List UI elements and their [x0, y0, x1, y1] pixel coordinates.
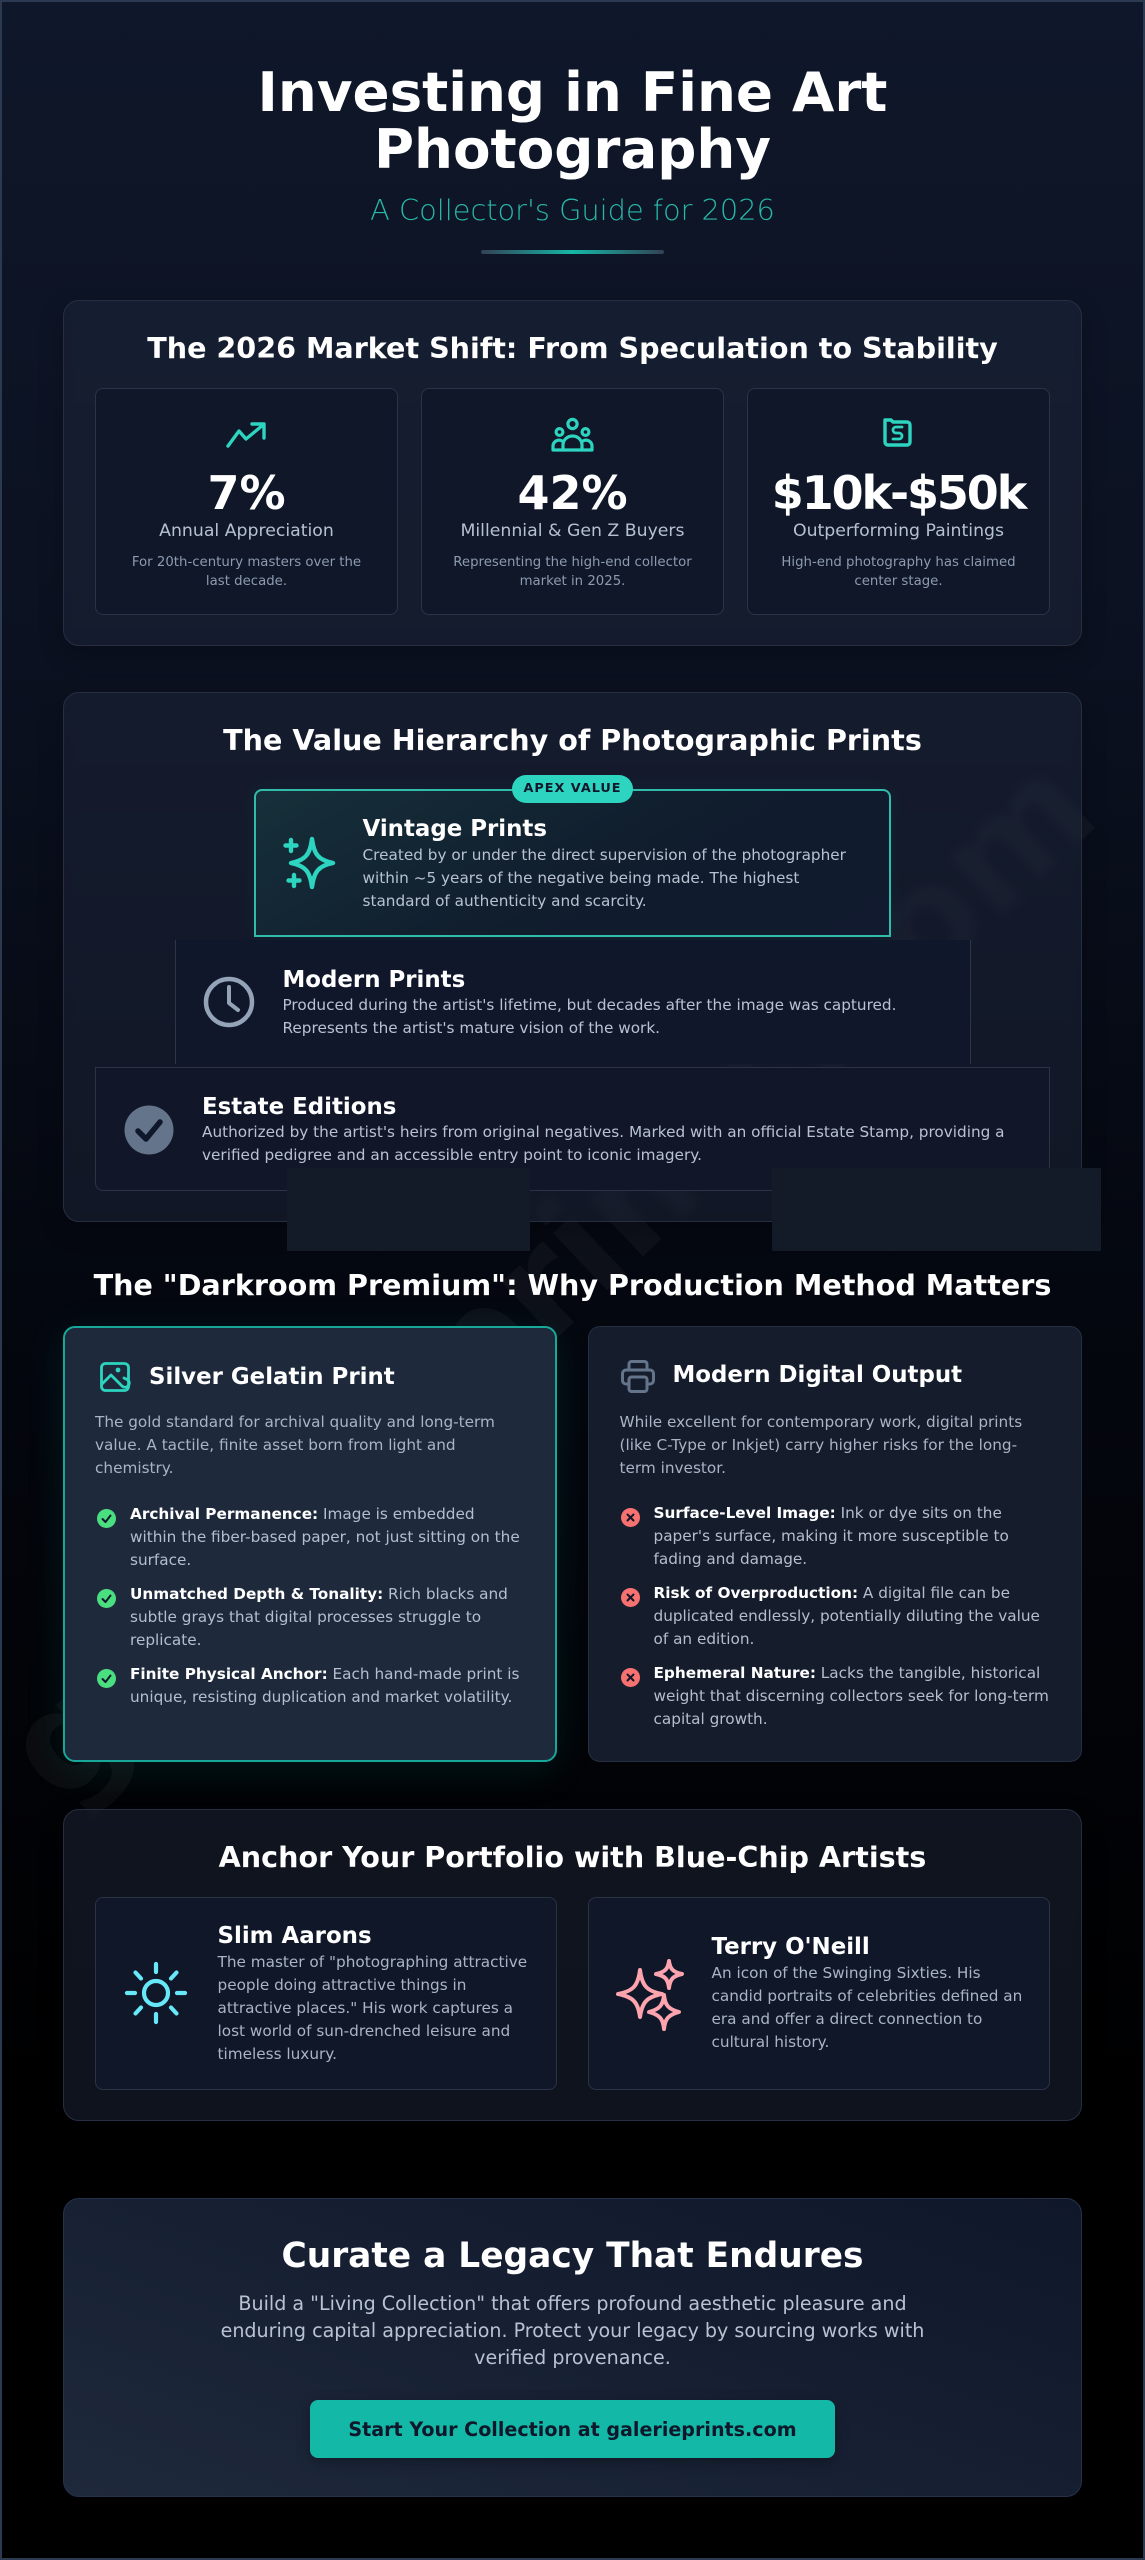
- badge: apex value: [512, 775, 633, 803]
- stat note: [781, 555, 1016, 589]
- list item: Ephemeral Nature: Lacks the tangible, historical: [654, 1664, 1040, 1682]
- list item: subtle grays that digital processes struggle to: [130, 1608, 481, 1626]
- list item: Risk of Overproduction: A digital file can be: [654, 1584, 1010, 1602]
- list item: capital growth.: [654, 1710, 768, 1728]
- card description: (like C-Type or Inkjet) carry higher risks for the long-: [620, 1436, 1017, 1454]
- list item: Surface-Level Image: Ink or dye sits on the: [654, 1504, 1002, 1522]
- heading: darkroom premium: The "Darkroom Premium": Why Production Method Matters: [94, 1268, 1051, 1302]
- list item: [130, 1505, 520, 1569]
- stat: price: $10k-$50k: [772, 466, 1025, 520]
- stat label: Outperforming Paintings: [793, 521, 1004, 541]
- tier: estate editions: [95, 1067, 1050, 1191]
- tier: vintage prints: [254, 789, 891, 937]
- panel: call to action: [63, 2198, 1082, 2497]
- tier description: [362, 846, 846, 910]
- stat card: price range: [747, 388, 1050, 615]
- artist name: Slim Aarons: [218, 1923, 372, 1949]
- title: Investing in Fine Art: [258, 60, 887, 124]
- heading: value hierarchy: The Value Hierarchy of Photographic Prints: [223, 723, 922, 757]
- x icon 3: [621, 1668, 640, 1687]
- list item: [654, 1504, 1009, 1568]
- artist description: lost world of sun-drenched leisure and: [218, 2022, 510, 2040]
- icon: check badge: [124, 1106, 174, 1154]
- tier title: Vintage Prints: [362, 816, 547, 842]
- list item: Archival Permanence: Image is embedded: [130, 1505, 475, 1523]
- artist description: people doing attractive things in: [218, 1976, 466, 1994]
- icon: people: [551, 418, 594, 452]
- list item: unique, resisting duplication and market volatility.: [130, 1688, 512, 1706]
- artist description: timeless luxury.: [218, 2045, 337, 2063]
- panel: market shift: [63, 300, 1082, 646]
- heading: market shift: The 2026 Market Shift: From Speculation to Stability: [147, 330, 998, 364]
- icon: stars: [616, 1959, 684, 2031]
- tier description: Produced during the artist's lifetime, but decades after the image was captured.: [282, 996, 896, 1014]
- tier description: [202, 1123, 1005, 1164]
- check icon 1: [97, 1509, 116, 1528]
- cta text: enduring capital appreciation. Protect your legacy by sourcing works with: [221, 2319, 924, 2342]
- tier title: Estate Editions: [202, 1094, 396, 1120]
- stat note: For 20th-century masters over the: [132, 555, 361, 570]
- panel: blue-chip artists: [63, 1809, 1082, 2121]
- icon: clock: [204, 976, 254, 1028]
- heading: blue-chip artists: Anchor Your Portfolio with Blue-Chip Artists: [219, 1840, 926, 1874]
- icon: banknote: [883, 418, 912, 447]
- list item: [654, 1664, 1049, 1728]
- artist description: cultural history.: [712, 2033, 829, 2051]
- list item: surface.: [130, 1551, 191, 1569]
- list item: paper's surface, making it more susceptible to: [654, 1527, 1009, 1545]
- card description: value. A tactile, finite asset born from light and: [95, 1436, 456, 1454]
- icon: sun: [124, 1962, 188, 2024]
- tier description: standard of authenticity and scarcity.: [362, 892, 647, 910]
- tier description: Created by or under the direct supervision of the photographer: [362, 846, 846, 864]
- list item: Unmatched Depth & Tonality: Rich blacks and: [130, 1585, 508, 1603]
- panel: silver gelatin print: [63, 1326, 557, 1762]
- stat label: Millennial & Gen Z Buyers: [460, 521, 685, 541]
- list item: of an edition.: [654, 1630, 754, 1648]
- artist description: era and offer a direct connection to: [712, 2010, 982, 2028]
- tier: modern prints: [175, 940, 971, 1064]
- stat: 42%: 42%: [517, 466, 628, 520]
- artist name: Terry O'Neill: [712, 1934, 870, 1960]
- title: Photography: [374, 117, 771, 181]
- stat card: buyers: [421, 388, 724, 615]
- tier description: verified pedigree and an accessible entry point to iconic imagery.: [202, 1146, 702, 1164]
- stat label: Annual Appreciation: [159, 521, 334, 541]
- card description: While excellent for contemporary work, digital prints: [620, 1412, 1022, 1430]
- cta button: [310, 2400, 835, 2458]
- list item: Finite Physical Anchor: Each hand-made print is: [130, 1665, 519, 1683]
- artifact patch right: [772, 1168, 1101, 1251]
- artist description: attractive places." His work captures a: [218, 1999, 513, 2017]
- artist card: slim aarons: [95, 1897, 557, 2090]
- stat note: center stage.: [854, 574, 943, 589]
- card description: [620, 1412, 1022, 1476]
- list item: duplicated endlessly, potentially diluting the value: [654, 1607, 1040, 1625]
- tier description: within ~5 years of the negative being made. The highest: [362, 869, 799, 887]
- tier description: Authorized by the artist's heirs from original negatives. Marked with an official Estate Stamp, providing a: [202, 1123, 1005, 1141]
- stat card: annual appreciation: [95, 388, 398, 615]
- stat note: market in 2025.: [520, 574, 625, 589]
- list item: within the fiber-based paper, not just sitting on the: [130, 1528, 520, 1546]
- list item: [130, 1585, 508, 1649]
- stat: 7%: 7%: [207, 466, 286, 520]
- artist description: An icon of the Swinging Sixties. His: [712, 1964, 981, 1982]
- artist card: terry o'neill: [588, 1897, 1050, 2090]
- list item: [130, 1665, 519, 1706]
- title divider: [481, 250, 664, 254]
- x icon 1: [621, 1508, 640, 1527]
- artist description: [712, 1964, 1022, 2051]
- icon: printer: [621, 1360, 655, 1393]
- cta text: Build a "Living Collection" that offers profound aesthetic pleasure and: [238, 2292, 907, 2315]
- card description: The gold standard for archival quality and long-term: [95, 1413, 495, 1431]
- panel: value hierarchy: [63, 692, 1082, 1222]
- panel: modern digital output: [588, 1326, 1082, 1762]
- artifact patch left: [287, 1168, 530, 1251]
- icon: image: [100, 1362, 131, 1392]
- card title: Modern Digital Output: [672, 1362, 962, 1388]
- card description: term investor.: [620, 1458, 726, 1476]
- card description: [94, 1413, 495, 1477]
- icon: sparkles: [283, 836, 336, 890]
- tier title: Modern Prints: [282, 966, 465, 992]
- stat note: [132, 555, 361, 589]
- subtitle: A Collector's Guide for 2026: [370, 193, 775, 227]
- cta heading: Curate a Legacy That Endures: [281, 2236, 864, 2276]
- list item: [654, 1584, 1040, 1648]
- list item: replicate.: [130, 1631, 201, 1649]
- title: [258, 60, 887, 181]
- check icon 2: [97, 1589, 116, 1608]
- stat note: Representing the high-end collector: [453, 555, 692, 570]
- artist description: candid portraits of celebrities defined an: [712, 1987, 1022, 2005]
- artist description: [217, 1953, 527, 2063]
- stat note: High-end photography has claimed: [781, 555, 1016, 570]
- x icon 2: [621, 1588, 640, 1607]
- cta text: verified provenance.: [474, 2346, 671, 2369]
- artist description: The master of "photographing attractive: [218, 1953, 527, 1971]
- card description: chemistry.: [95, 1459, 174, 1477]
- list item: weight that discerning collectors seek for long-term: [654, 1687, 1049, 1705]
- list item: fading and damage.: [654, 1550, 807, 1568]
- tier description: [282, 996, 896, 1037]
- cta text: [221, 2292, 924, 2369]
- stat note: [453, 555, 692, 589]
- badge: apex value: APEX VALUE: [523, 781, 622, 796]
- icon: trending up: [226, 422, 266, 448]
- check icon 3: [97, 1669, 116, 1688]
- tier description: Represents the artist's mature vision of the work.: [282, 1019, 660, 1037]
- stat note: last decade.: [206, 574, 287, 589]
- cta button: Start Your Collection at galerieprints.com: [348, 2418, 797, 2441]
- card title: Silver Gelatin Print: [149, 1364, 395, 1390]
- watermark: galerieprints.com: [0, 723, 1126, 1832]
